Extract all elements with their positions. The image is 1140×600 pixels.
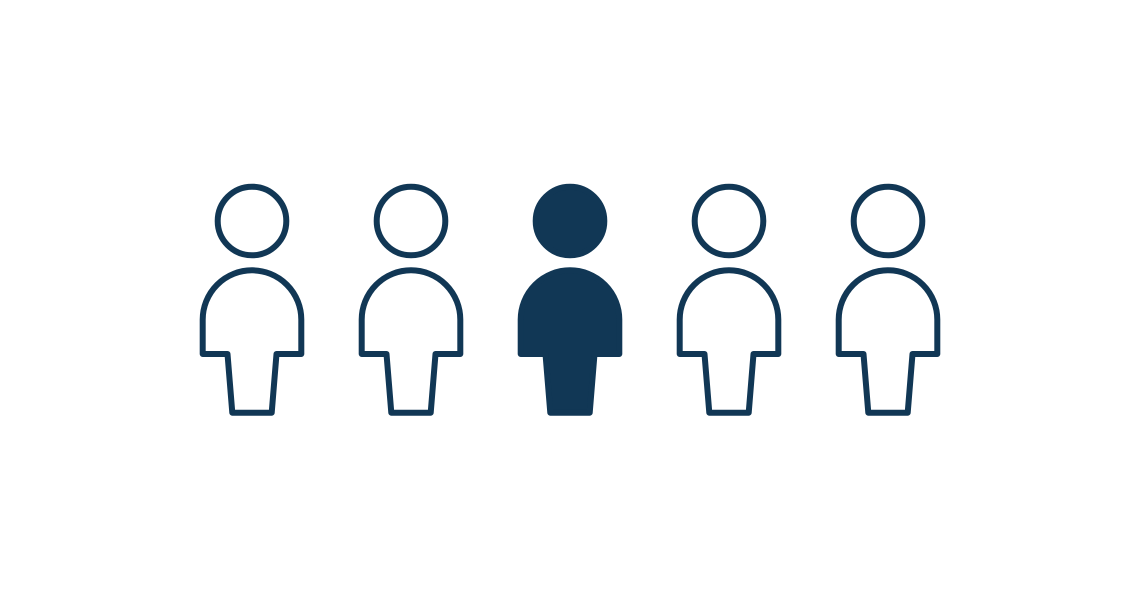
icon: person 4 outline xyxy=(680,187,778,413)
icon: person 5 outline xyxy=(839,187,937,413)
icon: person 1 outline xyxy=(203,187,301,413)
icon: person 2 outline xyxy=(362,187,460,413)
icon: person 3 filled highlight xyxy=(521,187,619,413)
